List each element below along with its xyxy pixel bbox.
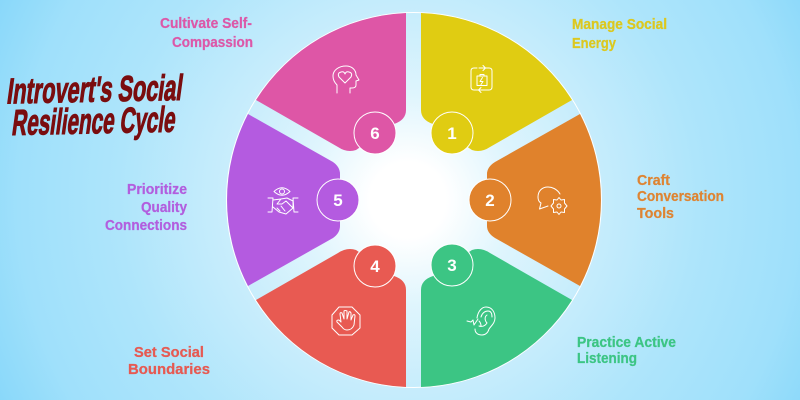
label: set social boundaries: Boundaries — [128, 362, 210, 378]
icon: speech bubble and gear — [538, 187, 567, 214]
label: manage social energy: Manage Social — [572, 17, 667, 33]
segment 2: craft conversation tools: 2 — [485, 191, 495, 210]
label: cultivate self-compassion: Cultivate Self- — [160, 16, 252, 32]
segment 6: cultivate self-compassion — [256, 13, 406, 154]
title: Resilience Cycle — [10, 100, 179, 144]
label: set social boundaries — [128, 345, 210, 378]
icon: stop hand — [332, 307, 360, 335]
label: prioritize quality connections: Quality — [141, 200, 187, 216]
segment 4: set social boundaries: 4 — [370, 257, 380, 276]
segment 2: craft conversation tools — [469, 114, 601, 286]
segment 4: set social boundaries — [256, 245, 406, 387]
label: cultivate self-compassion — [160, 16, 253, 51]
label: craft conversation tools: Craft — [637, 173, 670, 189]
label: cultivate self-compassion: Compassion — [172, 35, 253, 51]
title: Introvert's Social — [5, 69, 185, 112]
label: craft conversation tools: Tools — [637, 206, 674, 222]
segment 1: manage social energy: 1 — [447, 124, 457, 143]
label: set social boundaries: Set Social — [134, 345, 204, 361]
label: practice active listening: Listening — [577, 351, 637, 367]
label: manage social energy: Energy — [572, 36, 616, 52]
label: manage social energy — [572, 17, 667, 52]
outer ring — [226, 12, 602, 388]
label: practice active listening: Practice Active — [577, 335, 676, 351]
segment 5: prioritize quality connections — [227, 114, 359, 286]
label: prioritize quality connections: Connections — [105, 218, 187, 234]
label: prioritize quality connections: Prioritize — [127, 182, 187, 198]
label: craft conversation tools — [637, 173, 724, 222]
label: practice active listening — [577, 335, 676, 367]
segment 3: practice active listening — [421, 244, 572, 387]
segment 6: cultivate self-compassion: 6 — [370, 124, 380, 143]
segment 5: prioritize quality connections: 5 — [333, 191, 343, 210]
icon: battery with arrows — [471, 66, 492, 92]
label: craft conversation tools: Conversation — [637, 189, 724, 205]
icon: head with heart — [333, 66, 359, 93]
segment 3: practice active listening: 3 — [447, 256, 457, 275]
title — [5, 69, 185, 144]
label: prioritize quality connections — [105, 182, 187, 234]
icon: ear — [467, 307, 495, 335]
segment 1: manage social energy — [421, 13, 572, 154]
icon: eye and handshake — [268, 188, 298, 214]
